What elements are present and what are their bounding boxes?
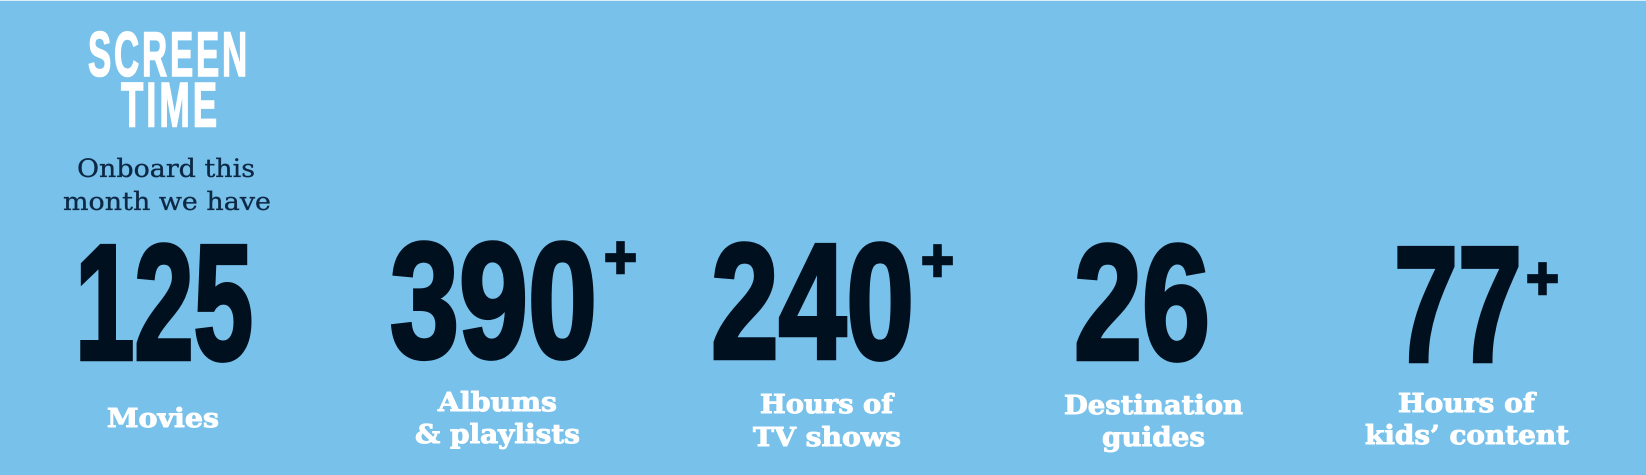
- stat: albums and playlists: Albums: [437, 388, 557, 418]
- stat: tv shows: 240: [711, 210, 914, 393]
- stat: kids content: [1365, 213, 1569, 451]
- stat: albums and playlists: 390: [390, 209, 597, 392]
- stat: destination guides: [1064, 211, 1243, 453]
- stat: albums and playlists: & playlists: [415, 420, 580, 450]
- stat: kids content: Hours of: [1398, 389, 1537, 419]
- stat: movies: [75, 211, 253, 434]
- stat: tv shows: Hours of: [760, 390, 895, 420]
- intro text: Onboard this: [77, 154, 255, 183]
- title: [88, 20, 250, 140]
- stat: tv shows: +: [921, 227, 954, 294]
- stat: tv shows: [711, 210, 954, 453]
- intro text: month we have: [63, 187, 271, 216]
- stat: kids content: 77: [1394, 213, 1522, 396]
- stat: kids content: kids’ content: [1365, 421, 1569, 451]
- stat: tv shows: TV shows: [753, 423, 901, 453]
- stat: destination guides: guides: [1102, 423, 1205, 453]
- title: TIME: [121, 70, 220, 140]
- stat: albums and playlists: +: [604, 224, 637, 291]
- stat: kids content: +: [1526, 245, 1559, 312]
- stat: destination guides: 26: [1074, 211, 1210, 394]
- title: SCREEN: [88, 20, 250, 90]
- stat: movies: Movies: [107, 404, 219, 434]
- intro text: [63, 154, 271, 216]
- stat: destination guides: Destination: [1064, 391, 1243, 421]
- stat: movies: 125: [75, 211, 253, 394]
